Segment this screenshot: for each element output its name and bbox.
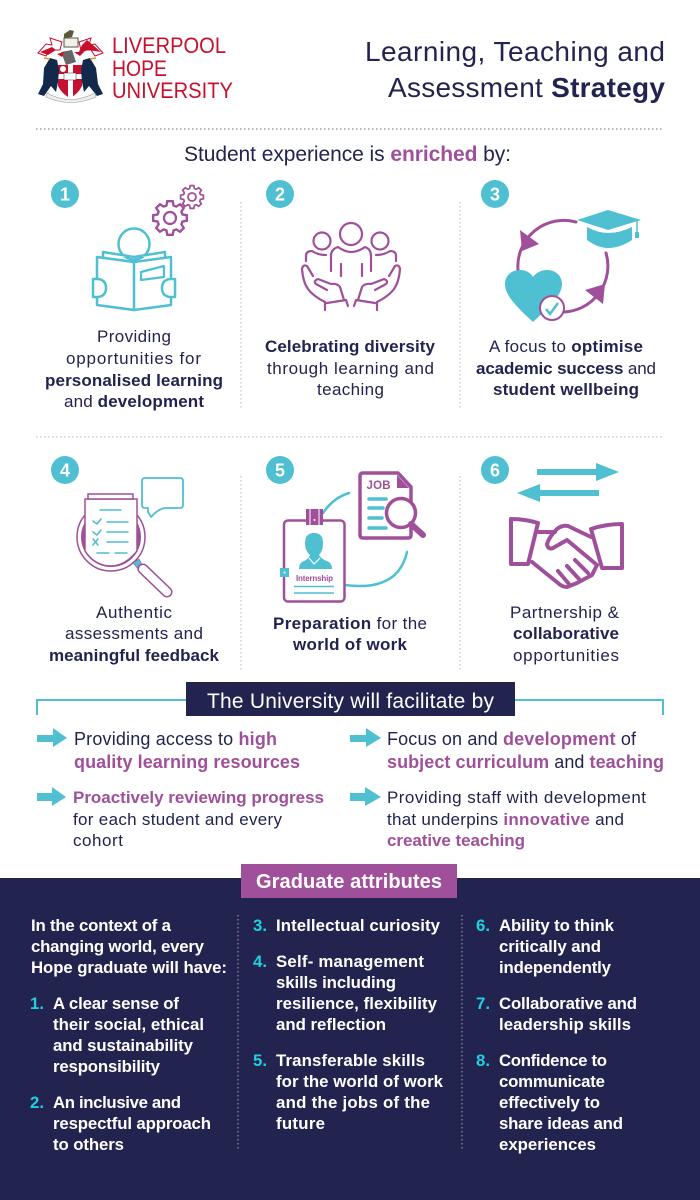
facilitate item 3: cohort <box>73 831 123 850</box>
attribute 4: and reflection <box>276 1015 386 1034</box>
attribute 7: leadership skills <box>499 1015 631 1034</box>
caption 2: through learning and <box>267 359 434 378</box>
facilitate item 2: subject curriculum and teaching <box>387 752 664 772</box>
caption 2: Celebrating diversity <box>265 337 436 356</box>
facilitate item 4: creative teaching <box>387 831 525 850</box>
title: Assessment Strategy <box>388 72 665 103</box>
attribute 4: skills including <box>276 973 396 992</box>
attribute 3: 3. <box>253 916 267 935</box>
facilitate item 4 <box>350 787 646 850</box>
attribute 6: Ability to think <box>499 916 615 935</box>
attribute 1: their social, ethical <box>53 1015 204 1034</box>
banner heading: The University will facilitate by <box>207 690 494 713</box>
caption 5: Preparation for the <box>273 614 427 633</box>
caption 1: Providing <box>97 327 171 346</box>
number badge 4 <box>51 456 79 484</box>
attribute 1: 1. <box>30 994 44 1013</box>
attribute 2: respectful approach <box>53 1114 211 1133</box>
caption 4: assessments and <box>65 624 203 643</box>
title: Learning, Teaching and <box>365 36 665 67</box>
attribute 5: Transferable skills <box>276 1051 425 1070</box>
caption 4: Authentic <box>96 603 172 622</box>
attribute 8: experiences <box>499 1135 596 1154</box>
facilitate item 3: Proactively reviewing progress <box>73 788 324 807</box>
facilitate item 1: Providing access to high <box>74 729 277 749</box>
facilitate item 1: quality learning resources <box>74 752 300 772</box>
wordmark: LIVERPOOL <box>112 33 226 58</box>
caption 1: opportunities for <box>66 349 201 368</box>
icon: magnifier over checklist <box>77 478 183 592</box>
caption 6: Partnership & <box>510 603 620 622</box>
intro text <box>31 916 227 977</box>
icon: reader with gears <box>93 186 203 310</box>
intro text: In the context of a <box>31 916 172 935</box>
caption 6: opportunities <box>513 646 619 665</box>
facilitate item 2: Focus on and development of <box>387 729 637 749</box>
icon: job search and internship card: JOB <box>366 480 390 492</box>
icon: people in hands <box>302 223 400 310</box>
panel: item 5 world of work <box>266 456 427 654</box>
graduate attributes heading: Graduate attributes <box>256 871 442 893</box>
number badge 3: 3 <box>490 184 500 204</box>
attribute 8: Confidence to <box>499 1051 607 1070</box>
attribute 2 <box>30 1093 211 1154</box>
attribute 4: Self- management <box>276 952 424 971</box>
attribute 6: critically and <box>499 937 601 956</box>
graduate attributes heading <box>241 864 457 898</box>
number badge 6 <box>481 456 509 484</box>
attribute 5: and the jobs of the <box>276 1093 430 1112</box>
attribute 7: 7. <box>476 994 490 1013</box>
caption 1 <box>45 327 223 411</box>
caption 1: and development <box>64 392 204 411</box>
number badge 6: 6 <box>490 460 500 480</box>
panel: graduate attributes <box>0 864 700 1200</box>
attribute 8: share ideas and <box>499 1114 623 1133</box>
facilitate item 4: Providing staff with development <box>387 788 646 807</box>
icon: job search and internship card <box>280 473 423 602</box>
wordmark: HOPE <box>112 56 167 81</box>
logo: Liverpool Hope University <box>38 30 233 103</box>
facilitate item 3 <box>37 787 324 850</box>
attribute 4: resilience, flexibility <box>276 994 438 1013</box>
panel: item 2 celebrating diversity <box>265 180 436 399</box>
crest <box>38 30 103 102</box>
intro text: changing world, every <box>31 937 205 956</box>
attribute 2: 2. <box>30 1093 44 1112</box>
attribute 1: A clear sense of <box>53 994 179 1013</box>
attribute 8: communicate <box>499 1072 605 1091</box>
icon: job search and internship card: Internship <box>296 574 333 583</box>
caption 4: meaningful feedback <box>49 646 220 665</box>
attribute 2: to others <box>53 1135 124 1154</box>
number badge 2: 2 <box>275 184 285 204</box>
icon: arrows and handshake <box>511 463 622 587</box>
attribute 5: future <box>276 1114 325 1133</box>
number badge 1 <box>51 180 79 208</box>
attribute 2: An inclusive and <box>53 1093 181 1112</box>
facilitate item 3: for each student and every <box>73 810 282 829</box>
attribute 3: Intellectual curiosity <box>276 916 441 935</box>
number badge 5: 5 <box>275 460 285 480</box>
wordmark: UNIVERSITY <box>112 78 233 103</box>
number badge 2 <box>266 180 294 208</box>
panel: item 3 academic success and wellbeing <box>476 180 656 399</box>
number badge 1: 1 <box>60 184 70 204</box>
caption 4 <box>49 603 220 665</box>
attribute 5: for the world of work <box>276 1072 444 1091</box>
attribute 5: 5. <box>253 1051 267 1070</box>
attribute 1: and sustainability <box>53 1036 194 1055</box>
attribute 6: 6. <box>476 916 490 935</box>
intro text: Hope graduate will have: <box>31 958 227 977</box>
number badge 5 <box>266 456 294 484</box>
caption 3: A focus to optimise <box>489 337 643 356</box>
panel: item 4 authentic assessments <box>49 456 220 665</box>
facilitate item 1 <box>37 728 300 772</box>
attribute 6: independently <box>499 958 612 977</box>
attribute 8: 8. <box>476 1051 490 1070</box>
icon: cycle of cap and heart <box>505 210 641 322</box>
caption 3 <box>476 337 656 399</box>
attribute 4: 4. <box>253 952 267 971</box>
attribute 6 <box>476 916 615 977</box>
facilitate item 2 <box>350 728 664 772</box>
caption 3: student wellbeing <box>493 380 639 399</box>
caption 6 <box>510 603 620 665</box>
facilitate item 4: that underpins innovative and <box>387 810 624 829</box>
wordmark <box>112 33 233 103</box>
caption 2: teaching <box>317 380 384 399</box>
caption 2 <box>265 337 436 399</box>
caption 5: world of work <box>292 635 408 654</box>
number badge 4: 4 <box>60 460 70 480</box>
caption 6: collaborative <box>513 624 619 643</box>
section heading: student experience: Student experience is enriched by: <box>184 143 511 166</box>
attribute 7 <box>476 994 637 1034</box>
panel: item 6 partnership <box>481 456 622 665</box>
title <box>365 36 665 103</box>
caption 3: academic success and <box>476 359 656 378</box>
attribute 7: Collaborative and <box>499 994 637 1013</box>
section: university will facilitate <box>37 682 664 850</box>
attribute 1 <box>30 994 204 1076</box>
attribute 4 <box>253 952 438 1034</box>
attribute 8 <box>476 1051 623 1154</box>
attribute 8: effectively to <box>499 1093 600 1112</box>
caption 5 <box>273 614 427 654</box>
banner heading <box>186 682 515 716</box>
caption 1: personalised learning <box>45 371 223 390</box>
attribute 1: responsibility <box>53 1057 161 1076</box>
panel: item 1 personalised learning <box>45 180 223 411</box>
attribute 5 <box>253 1051 444 1133</box>
number badge 3 <box>481 180 509 208</box>
